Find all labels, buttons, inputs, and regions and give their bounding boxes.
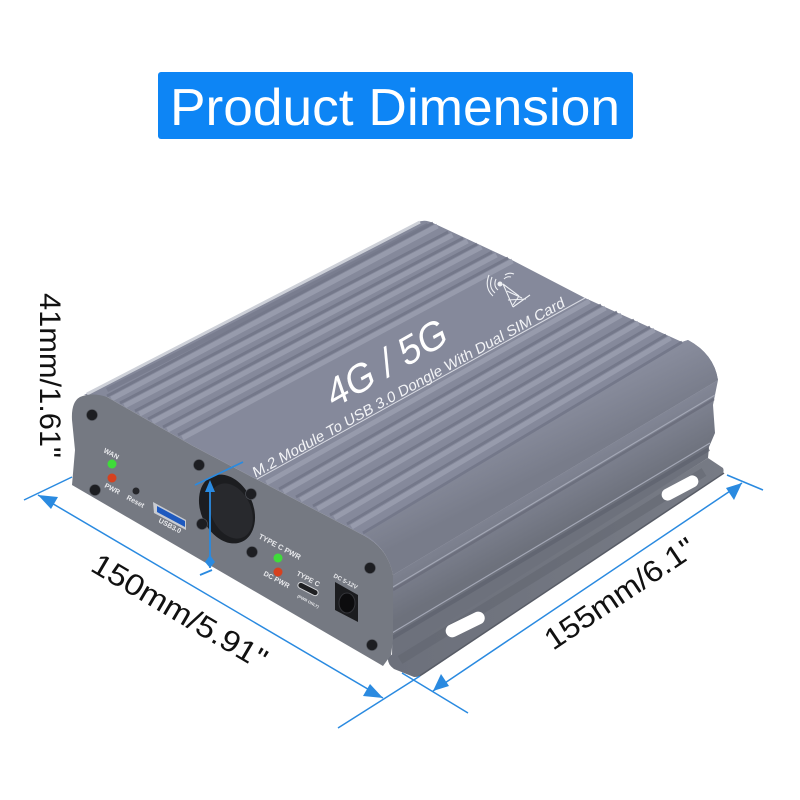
- rear highlight edge: [87, 222, 420, 394]
- ribs: back group: [107, 223, 512, 438]
- front face: [72, 394, 393, 666]
- port labels: [102, 448, 358, 609]
- port labels: DC PWR: [262, 571, 290, 590]
- depth dimension: 155mm/6.1": [402, 475, 763, 713]
- width dimension: 150mm/5.91": 150mm/5.91": [85, 548, 273, 677]
- shoulder: [363, 340, 718, 575]
- top text: 4G/5G: 4G / 5G: [321, 309, 453, 417]
- port labels: TYPE C PWR: [257, 532, 303, 562]
- icon: cell tower: [487, 273, 530, 307]
- reset button: [132, 488, 140, 494]
- port labels: USB3.0: [157, 518, 182, 535]
- LED indicators: [108, 460, 282, 576]
- port labels: PWR: [103, 483, 121, 496]
- height dimension: 41mm/1.61": [33, 293, 243, 575]
- title: Product Dimension: [170, 79, 620, 137]
- port labels: WAN: [102, 448, 120, 461]
- port labels: (PWR ONLY): [297, 593, 321, 609]
- mounting flange: [388, 458, 724, 677]
- USB-C port: [297, 581, 319, 597]
- port labels: DC 5-12V: [332, 573, 358, 591]
- USB 3.0 port: [153, 502, 186, 530]
- device: 4G/5G dongle enclosure: [72, 221, 724, 677]
- depth dimension: 155mm/6.1": 155mm/6.1": [538, 532, 702, 657]
- top label divider: [248, 298, 585, 484]
- screws: [86, 410, 378, 650]
- width dimension: 150mm/5.91": [24, 477, 420, 728]
- DC jack: [335, 582, 358, 622]
- port labels: TYPE C: [295, 571, 321, 589]
- antenna connector: [188, 465, 266, 553]
- height dimension: 41mm/1.61": 41mm/1.61": [33, 293, 66, 458]
- shoulder highlight line: [370, 342, 682, 528]
- side face: [392, 380, 718, 657]
- ribs: front group: [266, 301, 682, 533]
- top text: module description: M.2 Module To USB 3.0 Dongle With Dual SIM Card: [251, 294, 567, 482]
- port labels: Reset: [125, 495, 146, 510]
- top face: [84, 221, 718, 575]
